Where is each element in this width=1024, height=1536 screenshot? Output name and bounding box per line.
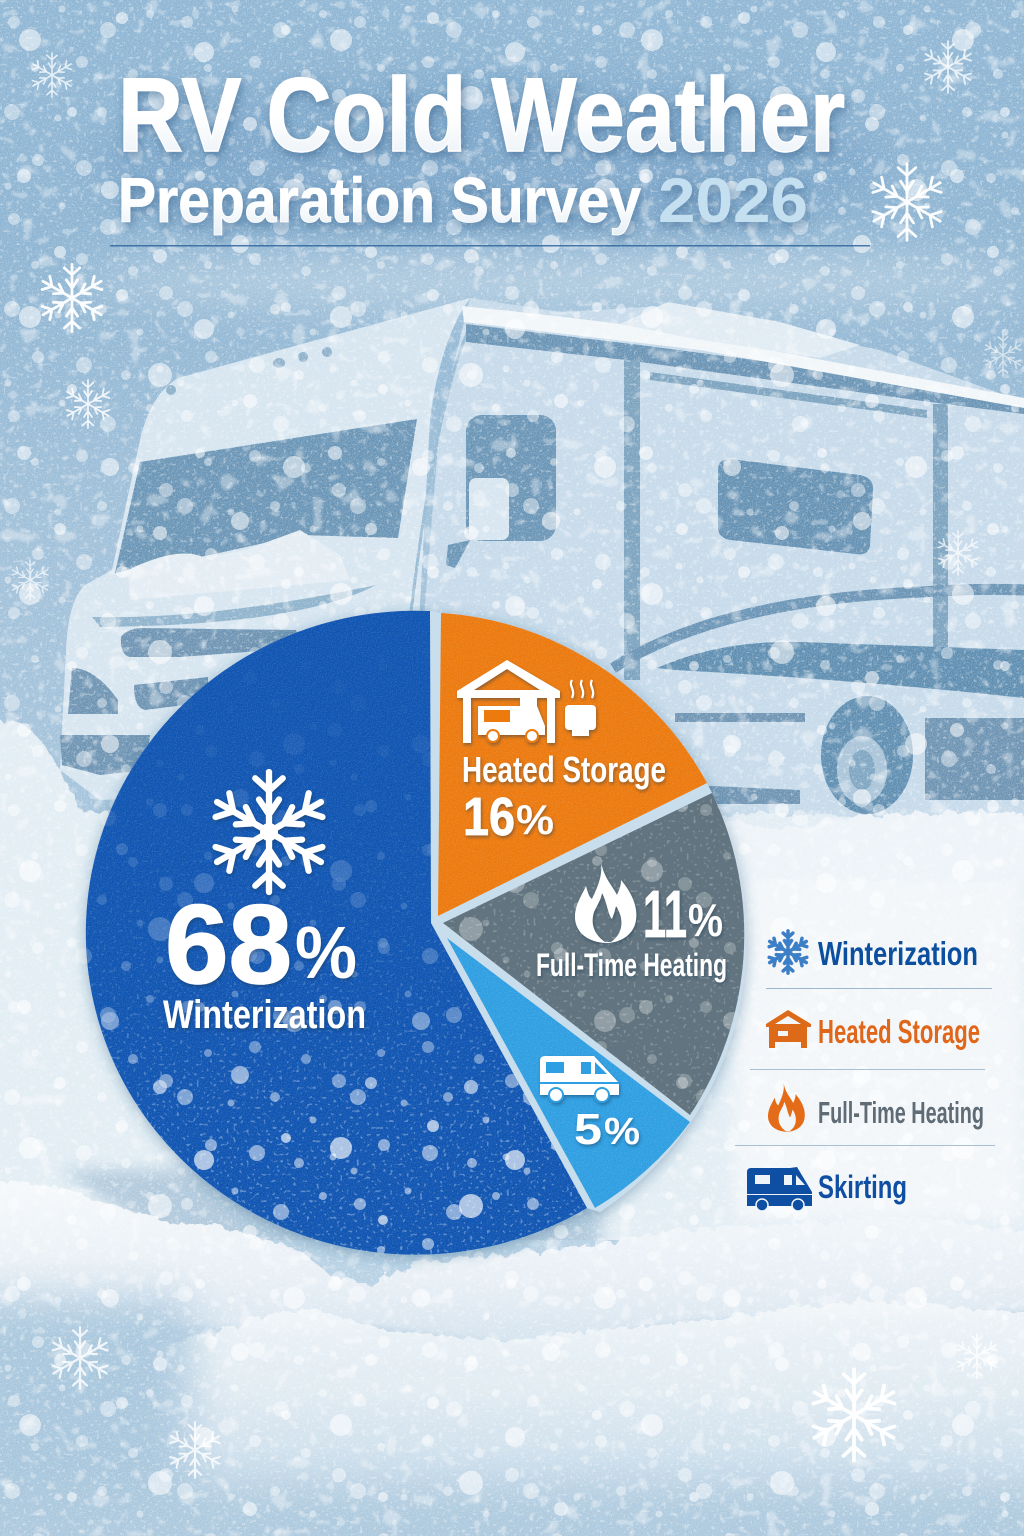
marker lights <box>166 347 332 395</box>
icon: snowflake <box>210 772 328 892</box>
legend row: heated storage <box>766 1010 980 1050</box>
slice: skirting 5% <box>447 938 690 1208</box>
slice: winterization 68% <box>86 610 587 1255</box>
pillars <box>624 360 948 680</box>
title block <box>118 57 845 236</box>
lower panel strips <box>675 713 1024 804</box>
value 16% <box>463 787 554 847</box>
icon: RV white <box>540 1056 619 1102</box>
icon: heater <box>565 680 596 736</box>
awning lower strip <box>650 372 927 418</box>
upper grille <box>121 628 300 657</box>
value 68%: 68 <box>165 882 292 1007</box>
wheel <box>821 696 913 814</box>
value 68% <box>165 882 357 1007</box>
value 5% <box>574 1105 640 1154</box>
swoosh thick <box>657 642 1024 698</box>
value 5%: % <box>604 1111 640 1153</box>
title line 2: Preparation Survey <box>118 166 641 236</box>
value 16%: 16 <box>463 787 515 847</box>
legend row: winterization: Winterization <box>818 935 978 972</box>
bumper <box>60 735 150 775</box>
legend <box>735 931 995 1211</box>
roof AC unit <box>620 302 860 358</box>
rear valley <box>130 1310 1024 1380</box>
shadow above front drift <box>60 1170 600 1300</box>
icon: flame <box>575 862 636 943</box>
front drift <box>0 1178 1024 1420</box>
left blue fade <box>0 1300 190 1536</box>
label heated storage: Heated Storage <box>462 749 666 790</box>
side window <box>718 459 873 554</box>
door seam <box>410 312 478 620</box>
side mirror <box>446 478 509 568</box>
bottom blue fade <box>0 1490 1024 1536</box>
RV cab front <box>60 298 470 800</box>
value 11%: % <box>688 894 723 946</box>
legend row: full-time heating <box>768 1083 984 1132</box>
winterization label <box>163 772 366 1037</box>
windshield <box>115 419 417 573</box>
legend row: skirting <box>747 1167 907 1211</box>
lower ground <box>0 1240 1024 1536</box>
title year: 2026 <box>658 166 808 236</box>
skirting label <box>540 1056 640 1154</box>
awning band <box>466 324 1024 414</box>
hood crease <box>92 585 376 627</box>
headlight <box>68 668 118 714</box>
snow on roof <box>462 306 1024 408</box>
legend snow panel <box>735 870 1024 1220</box>
RV side body <box>410 298 1024 820</box>
background illustration: snow-covered RV <box>60 298 1024 820</box>
lower grille <box>134 677 208 710</box>
second drift <box>130 1300 1024 1536</box>
title line 1: RV Cold Weather <box>118 57 845 174</box>
value 11%: 11 <box>643 877 687 952</box>
heated storage label <box>457 660 666 847</box>
value 5%: 5 <box>574 1105 602 1154</box>
legend row: skirting: Skirting <box>818 1169 907 1205</box>
snow ground behind chart <box>0 720 1024 1536</box>
legend row: winterization <box>767 931 978 973</box>
value 68%: % <box>295 911 357 994</box>
pie chart <box>80 600 780 1270</box>
door window <box>466 415 556 541</box>
slice: full-time heating 11% <box>440 785 750 1120</box>
title underline <box>110 245 870 246</box>
label full-time heating: Full-Time Heating <box>536 947 727 983</box>
pie backing <box>86 611 747 1255</box>
wiper snow <box>128 530 350 600</box>
value 16%: % <box>516 796 554 843</box>
swoosh thin <box>613 589 1024 668</box>
full-time heating label <box>536 862 727 983</box>
icon: garage with RV <box>457 660 560 743</box>
slice: heated storage 16% <box>438 613 707 916</box>
mid ground snow <box>0 720 1024 1300</box>
right ground drift <box>620 812 1024 880</box>
label winterization: Winterization <box>163 993 366 1037</box>
